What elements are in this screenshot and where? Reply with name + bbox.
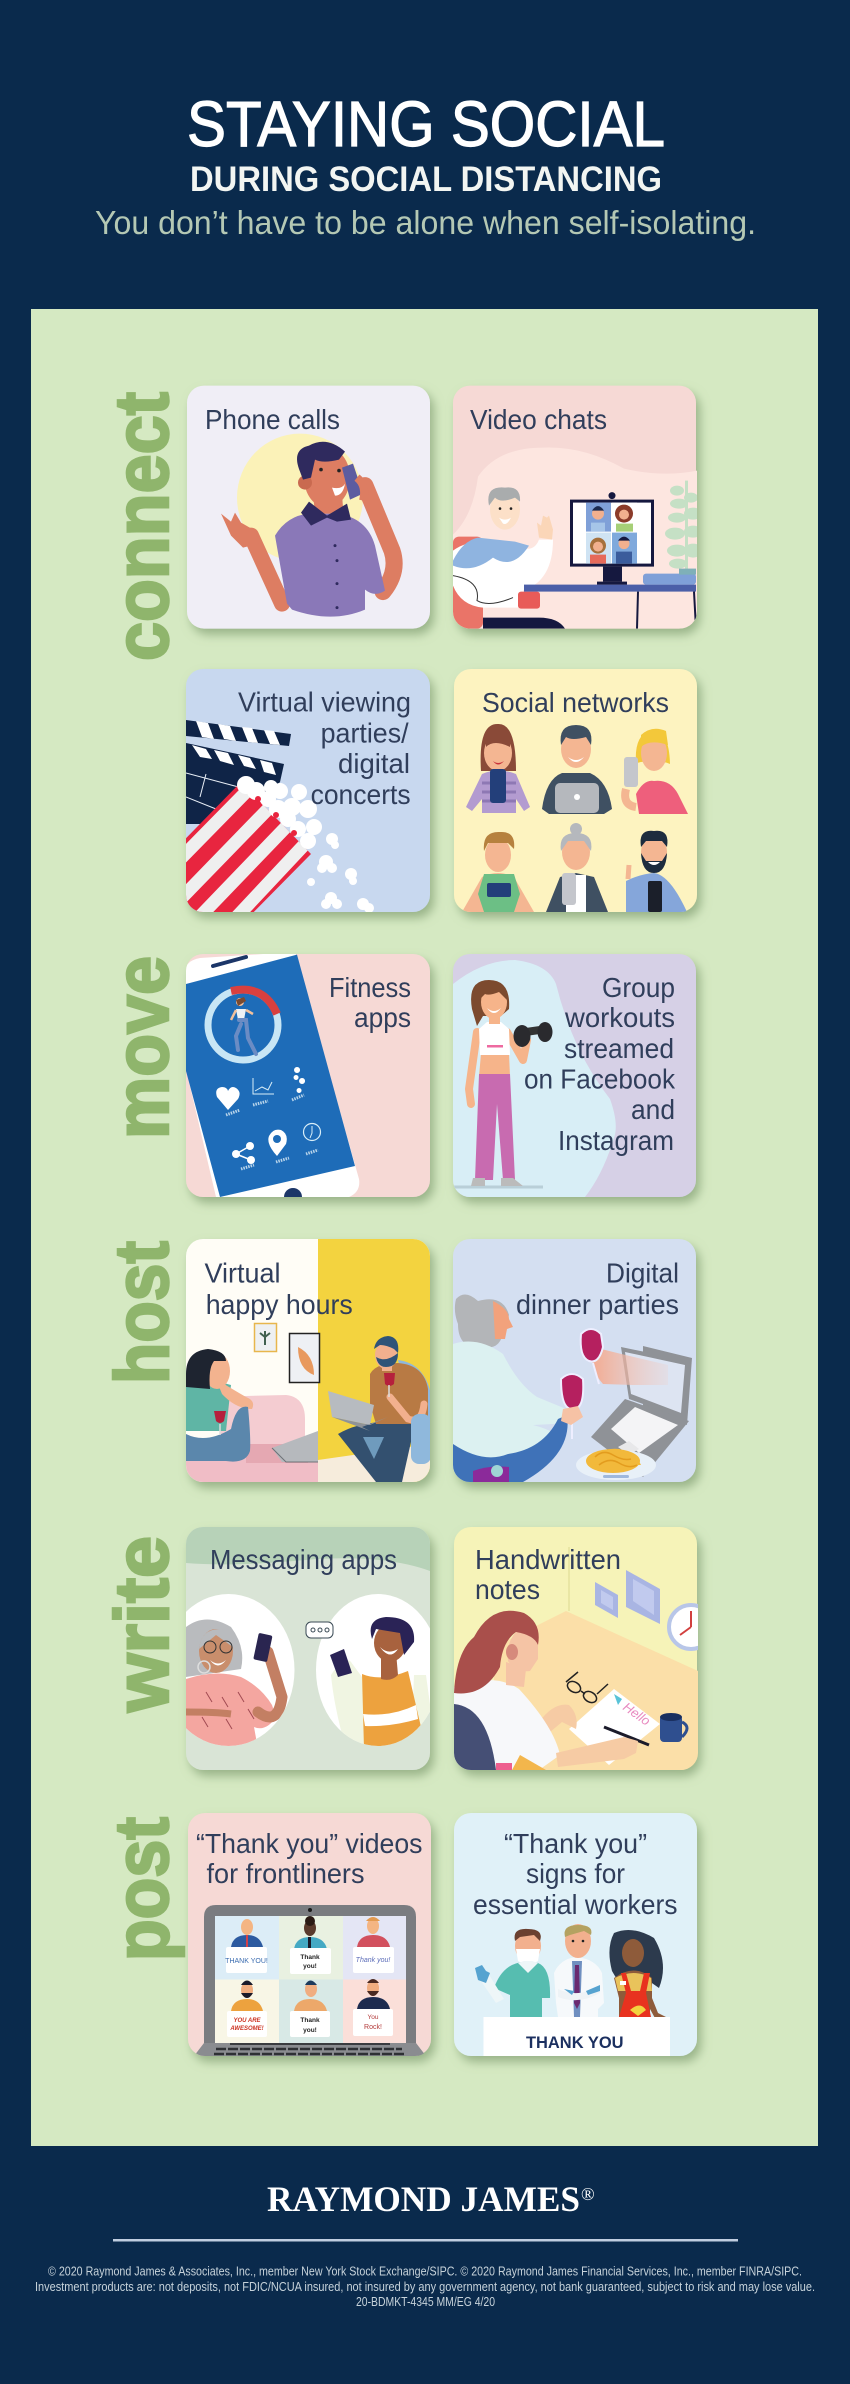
label: dinner parties	[516, 1289, 679, 1320]
icon: woman with dumbbell	[453, 960, 616, 1197]
logo: RAYMOND JAMES	[267, 2179, 580, 2219]
label: “Thank you” videos	[196, 1828, 422, 1859]
nurse	[475, 1929, 550, 2017]
icon: phone with fitness app	[186, 952, 359, 1206]
panel: group workouts	[453, 954, 696, 1197]
icon: clapperboard and popcorn	[186, 720, 374, 912]
card background	[453, 386, 696, 629]
sign person 1	[225, 1919, 268, 1973]
label: “Thank you”	[504, 1828, 647, 1859]
icon: two people with wine and laptops	[186, 1239, 433, 1482]
label: for frontliners	[206, 1858, 364, 1889]
icon: woman writing at desk	[454, 1547, 713, 1770]
person 1	[466, 724, 530, 813]
card background	[186, 669, 430, 912]
footer disclaimer: 20-BDMKT-4345 MM/EG 4/20	[356, 2294, 495, 2309]
speech bubble	[306, 1622, 333, 1638]
panel: thank you videos	[188, 1813, 431, 2056]
label: essential workers	[473, 1889, 678, 1920]
card background	[454, 1527, 697, 1770]
sign person 4: AWESOME!	[229, 2026, 264, 2032]
label: Virtual viewing	[238, 687, 411, 718]
right man	[330, 1617, 436, 1749]
icon: woman toasting laptop	[453, 1294, 692, 1482]
label	[329, 972, 411, 1033]
card background	[454, 1813, 697, 2056]
label: on Facebook	[524, 1064, 676, 1094]
panel: thank you signs	[454, 1813, 697, 2057]
heading: move: move	[100, 956, 185, 1139]
subtitle: DURING SOCIAL DISTANCING	[190, 160, 662, 199]
label	[475, 1544, 621, 1605]
sign person 4: YOU ARE	[233, 2018, 262, 2024]
person 3	[624, 729, 688, 814]
label: Social networks	[482, 687, 669, 718]
label: Fitness	[329, 972, 411, 1003]
sign person 3	[353, 1917, 394, 1973]
label: notes	[475, 1574, 540, 1605]
person 2	[542, 725, 612, 814]
sign person 5	[290, 1980, 330, 2037]
main green panel	[31, 309, 818, 2146]
card background	[453, 954, 696, 1197]
card background	[186, 1527, 430, 1770]
label	[524, 972, 676, 1156]
icon: three essential workers behind sign	[475, 1924, 670, 2057]
label: concerts	[311, 779, 411, 810]
heading: connect: connect	[100, 392, 185, 661]
label: apps	[354, 1002, 411, 1033]
icon: woman writing at desk: Hello	[620, 1699, 653, 1728]
icon: man on video call	[453, 447, 702, 629]
label: digital	[338, 748, 410, 779]
panel: fitness apps	[186, 952, 430, 1206]
label: Phone calls	[205, 404, 340, 435]
sign person 1: THANK YOU!	[225, 1958, 268, 1965]
title: STAYING SOCIAL	[187, 88, 665, 160]
sign person 6: You	[368, 2014, 379, 2021]
label	[473, 1828, 678, 1920]
label: and	[631, 1094, 675, 1125]
heading: write: write	[100, 1536, 185, 1713]
card background	[453, 1239, 696, 1482]
card background	[186, 954, 430, 1197]
title block	[95, 88, 756, 241]
label: Digital	[606, 1258, 679, 1288]
icon: man on phone	[221, 434, 394, 617]
label: Video chats	[470, 404, 607, 435]
logo: ®	[581, 2184, 595, 2204]
panel: phone calls	[187, 386, 430, 629]
panel: messaging apps	[162, 1527, 440, 1770]
icon: two people messaging	[186, 1527, 430, 1746]
label: workouts	[564, 1002, 675, 1033]
doctor	[554, 1924, 604, 2017]
sign person 4	[227, 1980, 267, 2037]
card background	[186, 1239, 430, 1482]
panel: video chats	[453, 386, 702, 629]
sign person 6: Rock!	[364, 2024, 382, 2031]
label: Messaging apps	[210, 1544, 397, 1575]
icon: six people with devices	[462, 724, 688, 912]
sign text: THANK YOU	[526, 2033, 624, 2052]
heading: host: host	[100, 1241, 185, 1384]
panel: digital dinner parties	[453, 1239, 696, 1482]
sign person 2	[290, 1916, 331, 1974]
sign person 6	[353, 1979, 393, 2036]
card background	[187, 386, 430, 629]
grocery worker	[609, 1930, 668, 2020]
sign person 5: Thank	[300, 2017, 320, 2024]
person 6	[626, 831, 687, 912]
card background	[454, 669, 697, 912]
label: streamed	[564, 1033, 674, 1064]
panel: virtual happy hours	[186, 1239, 433, 1482]
footer disclaimer	[35, 2264, 815, 2309]
label	[196, 1828, 422, 1889]
label: Instagram	[558, 1125, 674, 1156]
person 5	[546, 823, 608, 912]
label: parties/	[321, 718, 409, 749]
panel: social networks	[454, 669, 697, 912]
label: signs for	[526, 1858, 625, 1889]
sign person 5: you!	[303, 2027, 317, 2034]
label	[516, 1258, 679, 1320]
icon: laptop with thank-you grid	[194, 1905, 426, 2056]
label: Handwritten	[475, 1544, 621, 1575]
sign person 3: Thank you!	[356, 1957, 390, 1964]
heading: post: post	[100, 1817, 185, 1961]
sign person 2: Thank	[300, 1954, 320, 1961]
card background	[188, 1813, 431, 2056]
label	[204, 1258, 353, 1320]
label: Group	[602, 972, 675, 1003]
panel: handwritten notes	[454, 1527, 713, 1770]
tagline: You don’t have to be alone when self-isolating.	[95, 204, 756, 241]
person 4	[462, 832, 534, 912]
label	[238, 687, 411, 810]
label: happy hours	[206, 1289, 353, 1320]
left woman	[186, 1620, 282, 1749]
label: Virtual	[204, 1258, 280, 1288]
panel: virtual viewing parties	[184, 669, 440, 924]
sign person 2: you!	[303, 1963, 317, 1970]
